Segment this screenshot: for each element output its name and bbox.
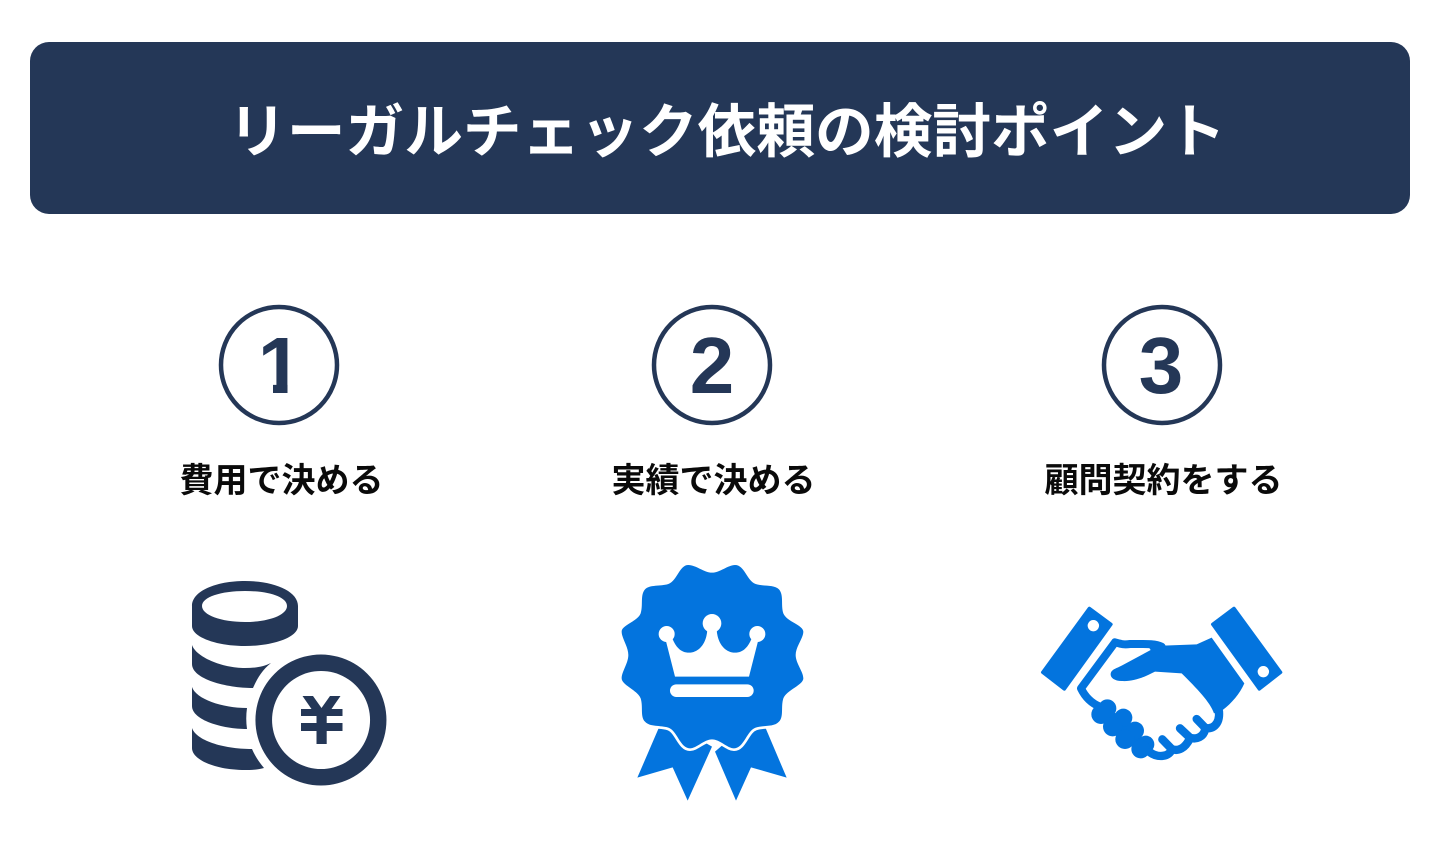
point 3 label: 顧問契約をする [1044,453,1282,502]
right cuff [1213,608,1281,689]
left hand outline [1081,642,1162,707]
right hand [1111,638,1244,713]
fingers [1150,712,1219,756]
point 3 number badge: 3 [1139,321,1183,410]
title banner [30,42,1410,214]
icon: rosette with crown [622,565,803,801]
point 1 label: 費用で決める [180,453,384,502]
left cuff [1043,608,1111,689]
point 1 number badge [221,307,337,423]
point 2 label: 実績で決める [612,453,816,502]
point 2 number badge: 2 [690,321,734,410]
point 2 number badge [654,307,770,423]
knuckles [1091,699,1154,758]
icon: coin stack with yen coin [192,581,386,786]
title: リーガルチェック依頼の検討ポイント [228,84,1226,169]
point 3 number badge [1104,307,1220,423]
icon: handshake [1043,608,1281,758]
crown [659,614,765,697]
ribbon tails [637,727,787,801]
point 1 number badge: 1 [258,321,302,410]
rosette [622,565,803,748]
